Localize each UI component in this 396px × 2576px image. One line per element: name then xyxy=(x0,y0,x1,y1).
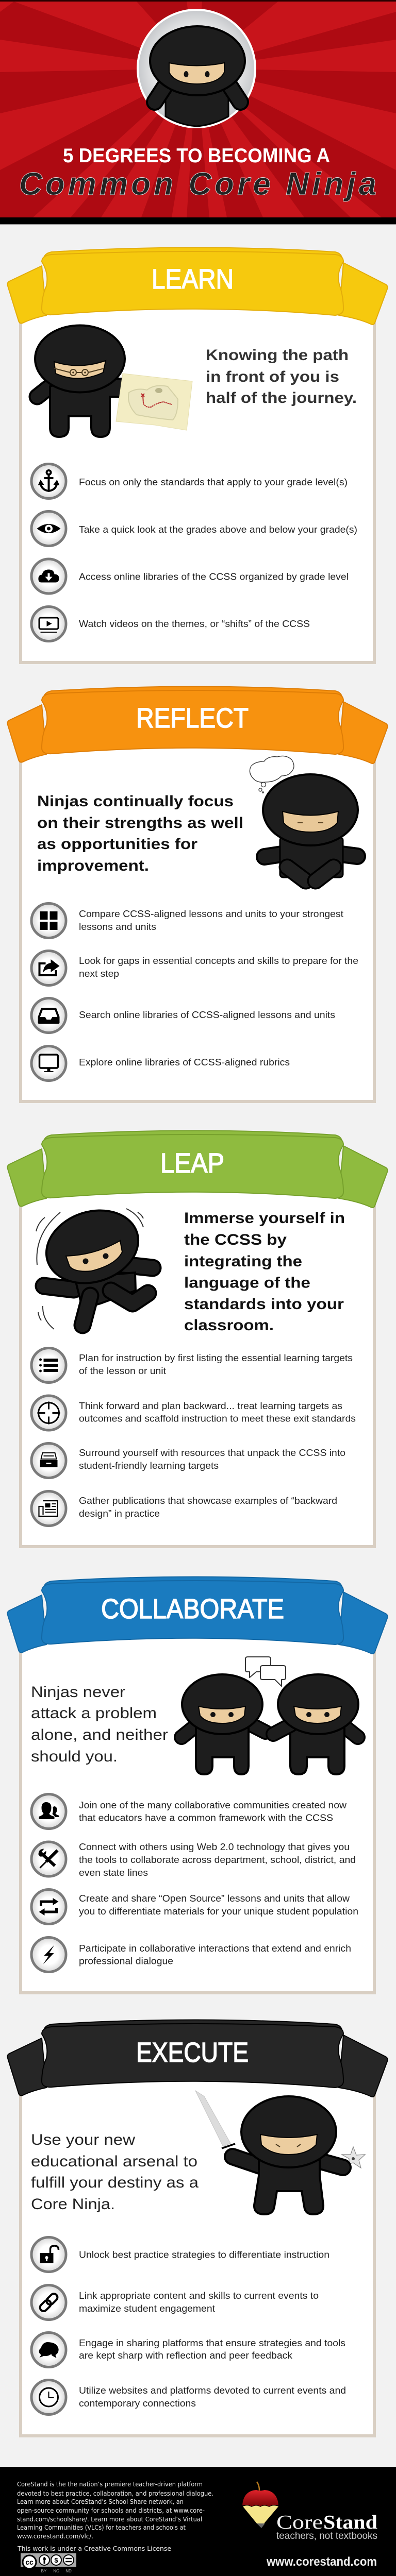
bullet text: Utilize websites and platforms devoted to current events and xyxy=(79,2385,346,2396)
icon: share xyxy=(31,951,66,985)
title xyxy=(19,145,376,202)
headline: Ninjas continually focus xyxy=(37,793,234,810)
bullet text: Explore online libraries of CCSS-aligned rubrics xyxy=(79,1057,290,1067)
footer xyxy=(0,2467,396,2576)
headline: alone, and neither xyxy=(31,1726,168,1743)
bullet text xyxy=(79,1943,351,1966)
bullet text: that educators have a common framework with the CCSS xyxy=(79,1812,333,1823)
ribbon: reflect: REFLECT xyxy=(136,703,249,734)
headline xyxy=(31,1684,168,1765)
ribbon: collaborate xyxy=(7,1577,388,1654)
ribbon: reflect xyxy=(7,686,388,764)
bullet text: of the lesson or unit xyxy=(79,1366,166,1376)
headline: improvement. xyxy=(37,857,149,874)
about text: CoreStand is the the nation’s premiere teacher-driven platform xyxy=(17,2481,203,2488)
about text: Learning Communities (VLCs) for teachers and schools at xyxy=(17,2524,186,2531)
bullet text xyxy=(79,1842,356,1878)
bullet text: Link appropriate content and skills to current events to xyxy=(79,2291,319,2301)
bullet text: Search online libraries of CCSS-aligned lessons and units xyxy=(79,1010,335,1020)
bullet text: the tools to collaborate across department, school, district, and xyxy=(79,1855,356,1865)
icon: link xyxy=(31,2285,66,2319)
creative commons badge: NC xyxy=(53,2569,59,2573)
icon: video xyxy=(31,607,66,641)
logo wordmark: Stand xyxy=(323,2512,377,2533)
bullet text xyxy=(79,956,358,979)
bullet text: professional dialogue xyxy=(79,1956,173,1966)
website: www.corestand.com xyxy=(266,2555,377,2569)
bullet text: Participate in collaborative interactions that extend and enrich xyxy=(79,1943,351,1954)
speech bubbles xyxy=(245,1657,286,1686)
icon: list xyxy=(31,1348,66,1383)
icon: cloud download xyxy=(31,559,66,594)
logo: apple pencil xyxy=(242,2482,278,2528)
two ninjas holding hands xyxy=(182,1674,358,1774)
headline: on their strengths as well xyxy=(37,815,243,832)
bullet text xyxy=(79,2338,345,2361)
icon: eye xyxy=(31,511,66,546)
icon: archive box xyxy=(31,1444,66,1478)
bullet text xyxy=(79,2385,346,2409)
bullet text: even state lines xyxy=(79,1868,148,1878)
bullet text: are kept sharp with reflection and peer feedback xyxy=(79,2350,293,2361)
ribbon: leap: LEAP xyxy=(160,1148,224,1179)
headline: Knowing the path xyxy=(206,347,349,364)
title: Common Core Ninja xyxy=(19,166,376,202)
headline: should you. xyxy=(31,1748,118,1765)
icon: newspaper xyxy=(31,1491,66,1526)
headline: half of the journey. xyxy=(206,389,357,406)
headline: in front of you is xyxy=(206,368,339,385)
icon: monitor xyxy=(31,1046,66,1081)
header banner xyxy=(0,0,396,225)
icon: grid xyxy=(31,904,66,938)
icon: target xyxy=(31,1396,66,1430)
headline: Core Ninja. xyxy=(31,2196,115,2213)
icon: retweet xyxy=(31,1890,66,1924)
bullet text: design” in practice xyxy=(79,1509,160,1519)
headline: classroom. xyxy=(184,1317,274,1334)
about text: Learn more about CoreStand’s School Share network, an xyxy=(17,2498,184,2505)
icon: clock xyxy=(31,2380,66,2414)
headline: the CCSS by xyxy=(184,1231,287,1248)
icon: bolt xyxy=(31,1937,66,1972)
headline: educational arsenal to xyxy=(31,2153,197,2170)
title: 5 DEGREES TO BECOMING A xyxy=(63,145,330,167)
headline: as opportunities for xyxy=(37,836,197,853)
tagline: teachers, not textbooks xyxy=(276,2531,377,2541)
bullet text: next step xyxy=(79,969,119,979)
headline: integrating the xyxy=(184,1253,302,1270)
bullet text: Connect with others using Web 2.0 technology that gives you xyxy=(79,1842,350,1852)
bullet text: Think forward and plan backward... treat learning targets as xyxy=(79,1401,342,1411)
thought cloud xyxy=(250,756,294,793)
bullet text xyxy=(79,909,343,932)
bullet text xyxy=(79,2291,319,2314)
icon: unlock xyxy=(31,2237,66,2272)
bullet text xyxy=(79,1401,356,1424)
icon: inbox xyxy=(31,998,66,1032)
headline: Immerse yourself in xyxy=(184,1210,345,1227)
creative commons badge: BY xyxy=(41,2569,47,2573)
bullet text: student-friendly learning targets xyxy=(79,1461,219,1471)
creative commons badge: $ xyxy=(54,2556,58,2564)
bullet text: Gather publications that showcase examples of “backward xyxy=(79,1496,337,1506)
about text: devoted to best practice, collaboration, and professional dialogue. xyxy=(17,2490,213,2497)
ribbon: learn xyxy=(7,247,388,325)
panel: leap xyxy=(7,1130,388,1547)
about text: www.corestand.com/vlc/. xyxy=(17,2533,93,2540)
about text: stand.com/schoolshare/. Learn more about CoreStand’s Virtual xyxy=(17,2516,202,2523)
headline xyxy=(184,1210,345,1334)
logo wordmark: Core xyxy=(276,2512,323,2533)
about text xyxy=(17,2481,213,2540)
icon: chat xyxy=(31,2333,66,2367)
logo wordmark xyxy=(276,2512,377,2533)
bullet text: Watch videos on the themes, or “shifts” of the CCSS xyxy=(79,619,310,629)
headline: standards into your xyxy=(184,1296,344,1313)
ribbon: learn: LEARN xyxy=(152,264,234,295)
headline xyxy=(31,2131,199,2213)
bullet text xyxy=(79,1496,337,1519)
panel: learn xyxy=(7,247,388,663)
headline: Ninjas never xyxy=(31,1684,125,1701)
creative commons badge xyxy=(21,2553,76,2573)
about text: open-source community for schools and districts, at www.core- xyxy=(17,2507,205,2514)
bullet text: Create and share “Open Source” lessons and units that allow xyxy=(79,1893,350,1904)
bullet text: Look for gaps in essential concepts and skills to prepare for the xyxy=(79,956,358,966)
bullet text: Compare CCSS-aligned lessons and units to your strongest xyxy=(79,909,343,919)
ribbon: execute: EXECUTE xyxy=(136,2037,249,2068)
running ninja xyxy=(36,1199,153,1329)
bullet text xyxy=(79,1800,347,1823)
headline: Use your new xyxy=(31,2131,135,2148)
bullet text: you to differentiate materials for your unique student population xyxy=(79,1906,358,1917)
panel: collaborate xyxy=(7,1577,388,1993)
bullet text: Engage in sharing platforms that ensure strategies and tools xyxy=(79,2338,345,2348)
bullet text: outcomes and scaffold instruction to meet these exit standards xyxy=(79,1414,356,1424)
bullet text xyxy=(79,1353,353,1376)
bullet text: Focus on only the standards that apply to your grade level(s) xyxy=(79,477,348,487)
bullet text: Take a quick look at the grades above and below your grade(s) xyxy=(79,524,357,535)
bullet text: Join one of the many collaborative communities created now xyxy=(79,1800,347,1810)
icon: tools xyxy=(31,1842,66,1876)
bullet text: Access online libraries of the CCSS organized by grade level xyxy=(79,572,349,582)
panel: reflect xyxy=(7,686,388,1101)
meditating ninja xyxy=(263,774,358,881)
ribbon: leap xyxy=(7,1130,388,1208)
ninja with map xyxy=(35,326,192,437)
panel: execute xyxy=(7,2020,388,2436)
creative commons badge: cc xyxy=(25,2558,34,2566)
headline xyxy=(37,793,243,874)
bullet text: contemporary connections xyxy=(79,2398,196,2409)
bullet text: lessons and units xyxy=(79,922,156,932)
headline: language of the xyxy=(184,1275,310,1291)
icon: anchor xyxy=(31,464,66,499)
bullet text: Unlock best practice strategies to differentiate instruction xyxy=(79,2249,329,2260)
ribbon: execute xyxy=(7,2020,388,2097)
bullet text: maximize student engagement xyxy=(79,2303,215,2314)
headline: attack a problem xyxy=(31,1705,157,1722)
bullet text xyxy=(79,1893,358,1917)
bullet text xyxy=(79,1448,345,1471)
header ninja emblem xyxy=(138,10,255,127)
license note: This work is under a Creative Commons License xyxy=(17,2545,171,2552)
creative commons badge: ND xyxy=(65,2569,72,2573)
headline: fulfill your destiny as a xyxy=(31,2174,199,2191)
ribbon: collaborate: COLLABORATE xyxy=(101,1594,284,1624)
bullet text: Surround yourself with resources that unpack the CCSS into xyxy=(79,1448,345,1458)
ninja with sword and shuriken xyxy=(195,2091,365,2214)
icon: users xyxy=(31,1794,66,1829)
bullet text: Plan for instruction by first listing the essential learning targets xyxy=(79,1353,353,1363)
headline xyxy=(206,347,357,406)
